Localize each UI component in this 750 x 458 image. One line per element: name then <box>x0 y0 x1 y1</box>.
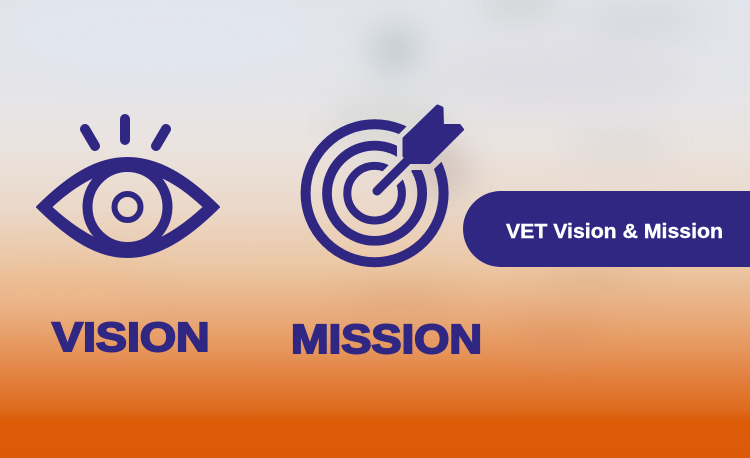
icon: eye <box>37 119 219 257</box>
icon: target with arrow <box>306 106 462 262</box>
eye rays <box>85 119 166 146</box>
arrow <box>377 106 462 191</box>
heading: mission: MISSION <box>291 316 482 362</box>
banner: VET Vision & Mission <box>463 191 750 267</box>
eye outline <box>37 158 219 257</box>
iris <box>88 167 168 247</box>
pupil <box>114 194 140 220</box>
banner: VET Vision & Mission: VET Vision & Mission <box>506 220 723 243</box>
target rings <box>306 124 444 262</box>
heading: vision: VISION <box>52 314 210 360</box>
